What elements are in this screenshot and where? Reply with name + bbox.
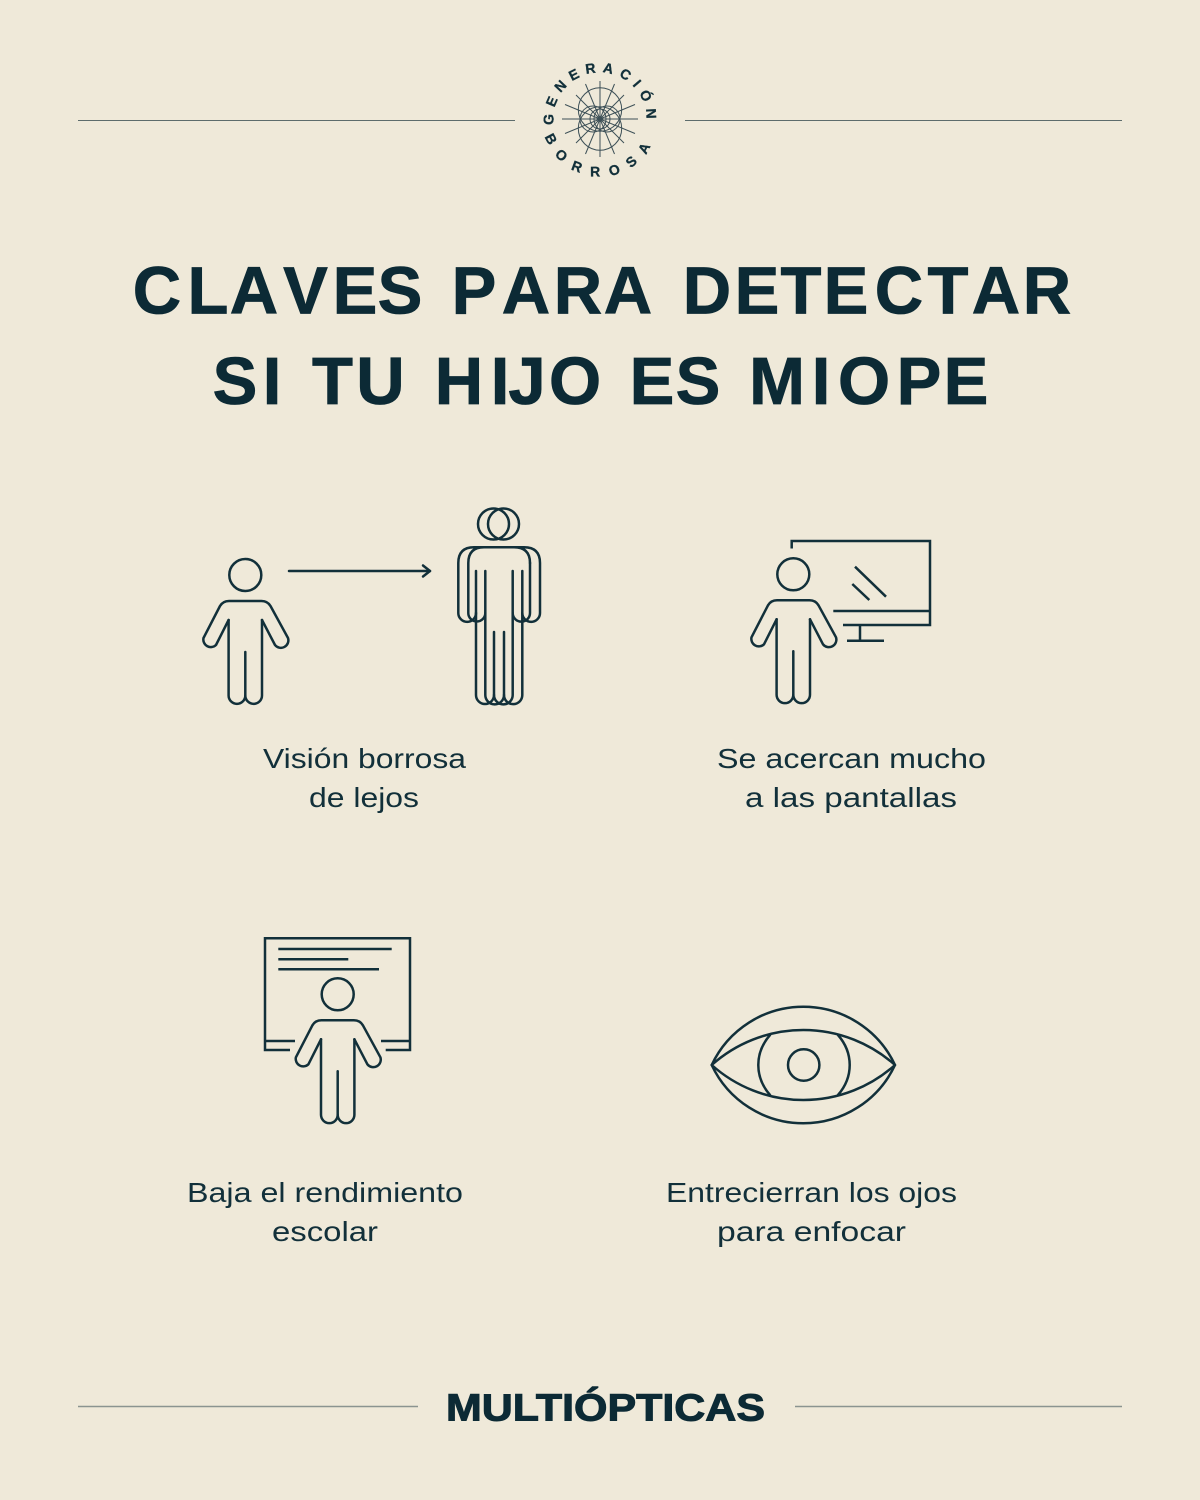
title line 2: SI TU HIJO ES MIOPE <box>213 344 988 419</box>
badge: Generación Borrosa <box>544 63 656 177</box>
logo: Multiópticas: MULTIÓPTICAS <box>446 1386 765 1430</box>
panel: vision borrosa de lejos <box>203 508 540 813</box>
badge web graphic <box>562 81 638 157</box>
caption <box>187 1177 463 1247</box>
caption <box>263 743 466 813</box>
caption: Se acercan mucho <box>717 743 986 774</box>
icon: monitor <box>792 541 930 641</box>
icon: blurred figure <box>458 508 540 704</box>
caption: Visión borrosa <box>263 743 466 774</box>
caption: Baja el rendimiento <box>187 1177 463 1208</box>
caption: para enfocar <box>717 1216 906 1247</box>
icon: eye <box>712 1007 895 1123</box>
panel: entrecierran los ojos para enfocar <box>666 1007 957 1247</box>
badge text bottom: BORROSA <box>544 132 651 177</box>
arrow <box>289 566 430 576</box>
caption <box>717 743 986 813</box>
caption: de lejos <box>309 782 419 813</box>
caption: escolar <box>272 1216 378 1247</box>
title line 1: CLAVES PARA DETECTAR <box>133 254 1071 328</box>
icon: person with blurred distant figure <box>203 508 540 704</box>
icon: person at blackboard <box>265 938 410 1123</box>
panel: baja el rendimiento escolar <box>187 938 463 1247</box>
icon: person <box>751 558 836 703</box>
icon: person at monitor <box>751 541 930 703</box>
badge text top: GENERACIÓN <box>544 63 656 124</box>
caption: Entrecierran los ojos <box>666 1177 957 1208</box>
panel: se acercan mucho a las pantallas <box>717 541 986 813</box>
icon: child figure <box>203 559 288 704</box>
caption <box>666 1177 957 1247</box>
icon: person <box>296 978 381 1123</box>
title <box>133 254 1071 419</box>
icon: blackboard <box>265 938 410 1050</box>
caption: a las pantallas <box>745 782 957 813</box>
